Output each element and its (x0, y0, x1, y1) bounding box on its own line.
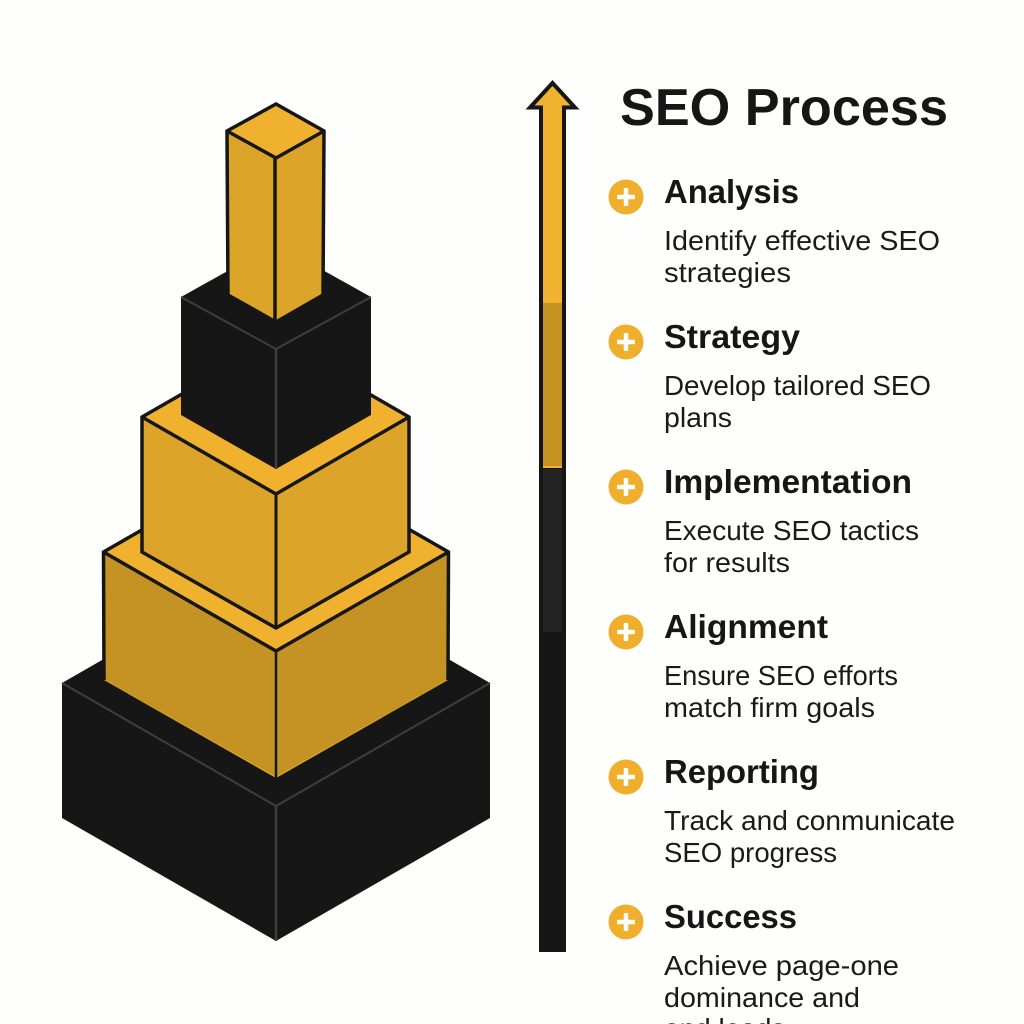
description: Reporting (664, 805, 955, 868)
description: Analysis (664, 225, 940, 288)
title: SEO Process (620, 79, 948, 137)
stacked isometric tower (62, 104, 490, 941)
heading: Success: Success (664, 898, 797, 935)
icon: plus (608, 470, 644, 504)
progress arrow (530, 83, 575, 952)
tower block: dark gold (103, 453, 448, 778)
heading: Implementation: Implementation (664, 463, 912, 500)
tower block: black (181, 244, 371, 469)
description: Success (664, 950, 899, 1024)
icon: plus (608, 614, 644, 650)
step: Analysis (608, 173, 940, 288)
step: Reporting (608, 753, 955, 868)
heading: Strategy: Strategy (664, 318, 801, 355)
step: Alignment (608, 608, 898, 723)
tower block: top gold column (227, 104, 324, 322)
description: Alignment: match firm goals (664, 692, 875, 723)
description: Reporting: SEO progress (664, 837, 837, 868)
icon: plus (608, 180, 644, 214)
description: Success: Achieve page-one (664, 950, 899, 981)
description: Alignment: Ensure SEO efforts (664, 660, 898, 691)
step: Implementation (608, 463, 919, 578)
tower block: black base (62, 560, 490, 941)
description: Implementation: Execute SEO tactics (664, 515, 919, 546)
description: Implementation: for results (664, 547, 790, 578)
description: Implementation (664, 515, 919, 578)
description: Analysis: Identify effective SEO (664, 225, 940, 256)
description: Success: dominance and (664, 982, 860, 1013)
tower block: gold (142, 340, 409, 628)
description: Reporting: Track and conmunicate (664, 805, 955, 836)
description: Strategy: Develop tailored SEO (664, 370, 931, 401)
step: Success (608, 898, 899, 1024)
icon: plus (608, 760, 644, 794)
heading: Analysis: Analysis (664, 173, 799, 210)
heading: Reporting: Reporting (664, 753, 819, 790)
description: Alignment (664, 660, 898, 723)
description: Strategy (664, 370, 931, 433)
step: Strategy (608, 318, 931, 433)
description: Strategy: plans (664, 402, 732, 433)
icon: plus (608, 324, 644, 360)
icon: plus (608, 904, 644, 940)
heading: Alignment: Alignment (664, 608, 828, 645)
description: Analysis: strategies (664, 257, 791, 288)
